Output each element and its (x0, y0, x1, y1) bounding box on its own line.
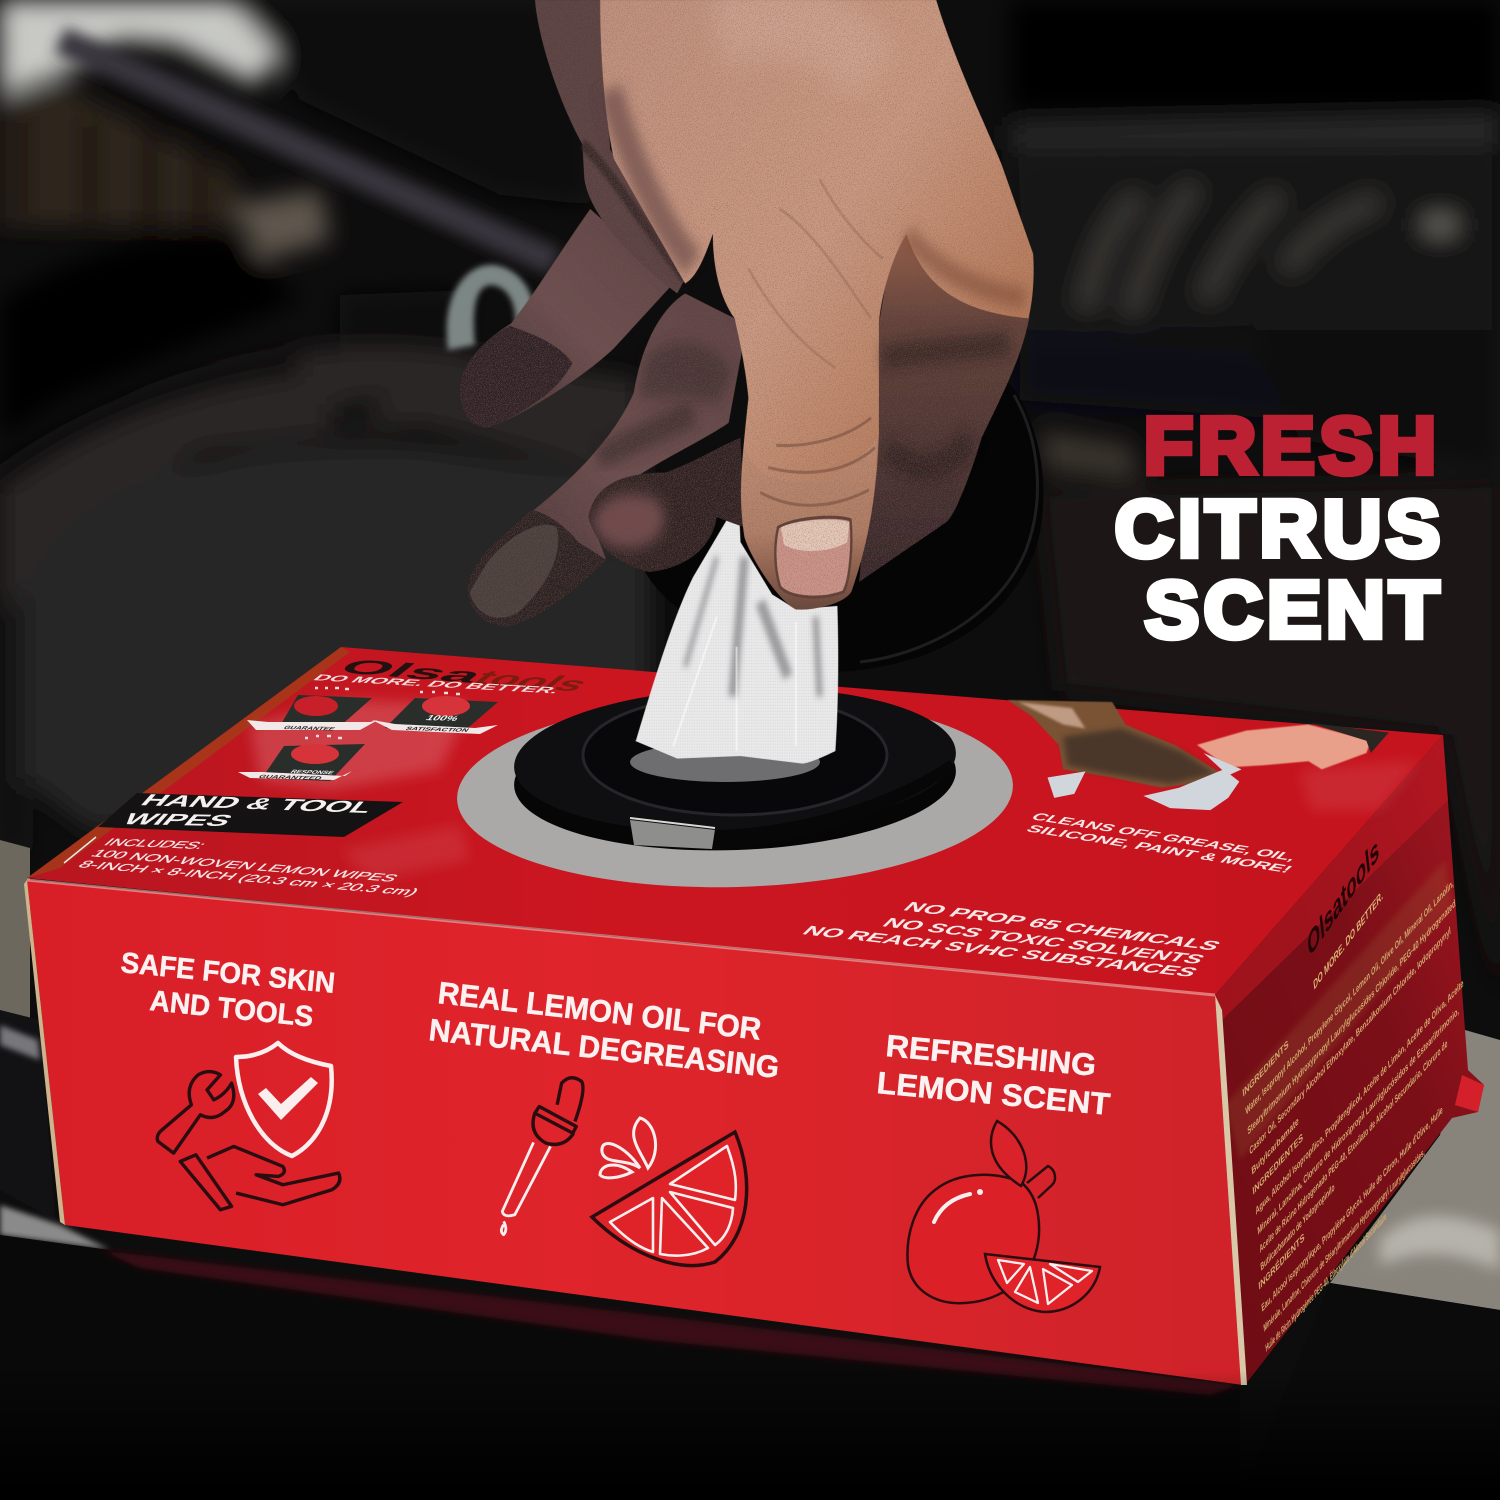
box side panel: Huile de Ricin Hydrogénée PEG-40, Éthoxylate d'Alcool Secondaire (1265, 1209, 1387, 1355)
index finger (460, 209, 673, 427)
icon: lemon (907, 1121, 1100, 1312)
box side panel: INGREDIENTES (1252, 1131, 1304, 1198)
badge: money back guarantee: GUARANTEE (282, 725, 337, 732)
title: fresh citrus scent: SCENT (1145, 565, 1444, 654)
wipe (636, 500, 838, 764)
title: fresh citrus scent: CITRUS (1115, 484, 1445, 573)
includes text: 100 NON-WOVEN LEMON WIPES (87, 848, 401, 884)
badge: money back guarantee (247, 688, 378, 732)
fingers and hand skin (460, 0, 1034, 626)
title: fresh citrus scent (1115, 401, 1445, 654)
box side panel: Butylcarbamate (1251, 1115, 1300, 1178)
badge: 30-minute response: GUARANTEED (257, 774, 323, 781)
badge: 100% satisfaction (372, 692, 498, 734)
bottom shadow (0, 1370, 1500, 1500)
front face: safe for skin block (119, 947, 340, 1210)
dispenser black collar (512, 680, 958, 858)
icon: lemon wedge with splash (592, 1118, 747, 1266)
hand and tool wipes banner: HAND & TOOL (136, 790, 380, 817)
badge: 100% satisfaction: SATISFACTION (404, 726, 470, 733)
box side panel: Castor Oil, Secondary Alcohol Ethoxylate, Benzalkonium Chloride, Iodopropynyl (1249, 925, 1451, 1158)
heading: refreshing lemon scent (875, 1028, 1112, 1122)
lid: open black cap behind the hand (645, 383, 1043, 672)
no chemicals text: NO REACH SVHC SUBSTANCES (798, 923, 1202, 980)
box side panel: Olsatools (1306, 830, 1381, 965)
thumbnail (775, 517, 851, 597)
back of hand (600, 0, 1034, 610)
icon: dropper (501, 1078, 583, 1235)
box side panel: Butilcarbamato de Yodopropinilo (1260, 1182, 1335, 1274)
heading: refreshing lemon scent: REFRESHING (884, 1028, 1098, 1083)
badge: 30-minute response (238, 736, 365, 781)
badge: 30-minute response: RESPONSE (289, 769, 336, 776)
hand and wipe, drawn in a scaled coordinate space (460, 0, 1034, 764)
product box (24, 647, 1484, 1385)
cleans off text: CLEANS OFF GREASE, OIL, (1027, 811, 1300, 863)
dark palm edge (859, 209, 1032, 582)
top face logo: Olsa (331, 655, 494, 687)
includes text (64, 837, 422, 898)
heading: safe for skin and tools: AND TOOLS (148, 985, 315, 1034)
front face: real lemon oil block (427, 975, 781, 1266)
heading: real lemon oil (427, 975, 781, 1085)
badge: 100% satisfaction: 100% (423, 714, 461, 723)
hand and tool wipes banner: WIPES (118, 809, 238, 830)
box side panel (1215, 735, 1484, 1385)
skin highlights and shadows (717, 20, 875, 75)
printed photo: hands with wipe (1007, 700, 1389, 810)
top face logo: DO MORE. DO BETTER. (309, 673, 564, 696)
box side panel: INGREDIENTS (1242, 1038, 1289, 1100)
heading: safe for skin and tools (119, 947, 336, 1034)
dispenser gray ring (455, 690, 1015, 894)
dark side of hand (535, 0, 685, 293)
box top face (27, 647, 1443, 995)
no chemicals text: NO SCS TOXIC SOLVENTS (878, 915, 1209, 967)
includes text: INCLUDES: (100, 837, 209, 851)
box side panel: DO MORE. DO BETTER. (1313, 887, 1383, 993)
icon: shield with check (236, 1043, 332, 1156)
hand and tool wipes banner (98, 790, 403, 837)
thumb joint (742, 438, 877, 610)
no chemicals text (798, 899, 1225, 980)
middle finger (468, 293, 742, 626)
top face gloss (250, 700, 1420, 880)
heading: real lemon oil: REAL LEMON OIL FOR (436, 975, 763, 1047)
box front face (27, 880, 1243, 1385)
cleans off text (1022, 811, 1300, 875)
no chemicals text: NO PROP 65 CHEMICALS (899, 899, 1225, 954)
heading: real lemon oil: NATURAL DEGREASING (427, 1012, 781, 1085)
cleans off text: SILICONE, PAINT & MORE! (1022, 823, 1295, 875)
front face: refreshing lemon scent block (875, 1028, 1112, 1312)
title: fresh citrus scent: FRESH (1144, 401, 1441, 490)
includes text: 8-INCH × 8-INCH (20.3 cm × 20.3 cm) (74, 859, 422, 898)
top face logo: tools (466, 666, 597, 695)
icon: wrench and hand (157, 1072, 340, 1210)
ring finger (588, 438, 744, 572)
heading: refreshing lemon scent: LEMON SCENT (875, 1065, 1112, 1122)
box side panel: INGRÉDIENTS (1258, 1229, 1305, 1293)
heading: safe for skin and tools: SAFE FOR SKIN (119, 947, 336, 1000)
top face logo (309, 655, 597, 696)
